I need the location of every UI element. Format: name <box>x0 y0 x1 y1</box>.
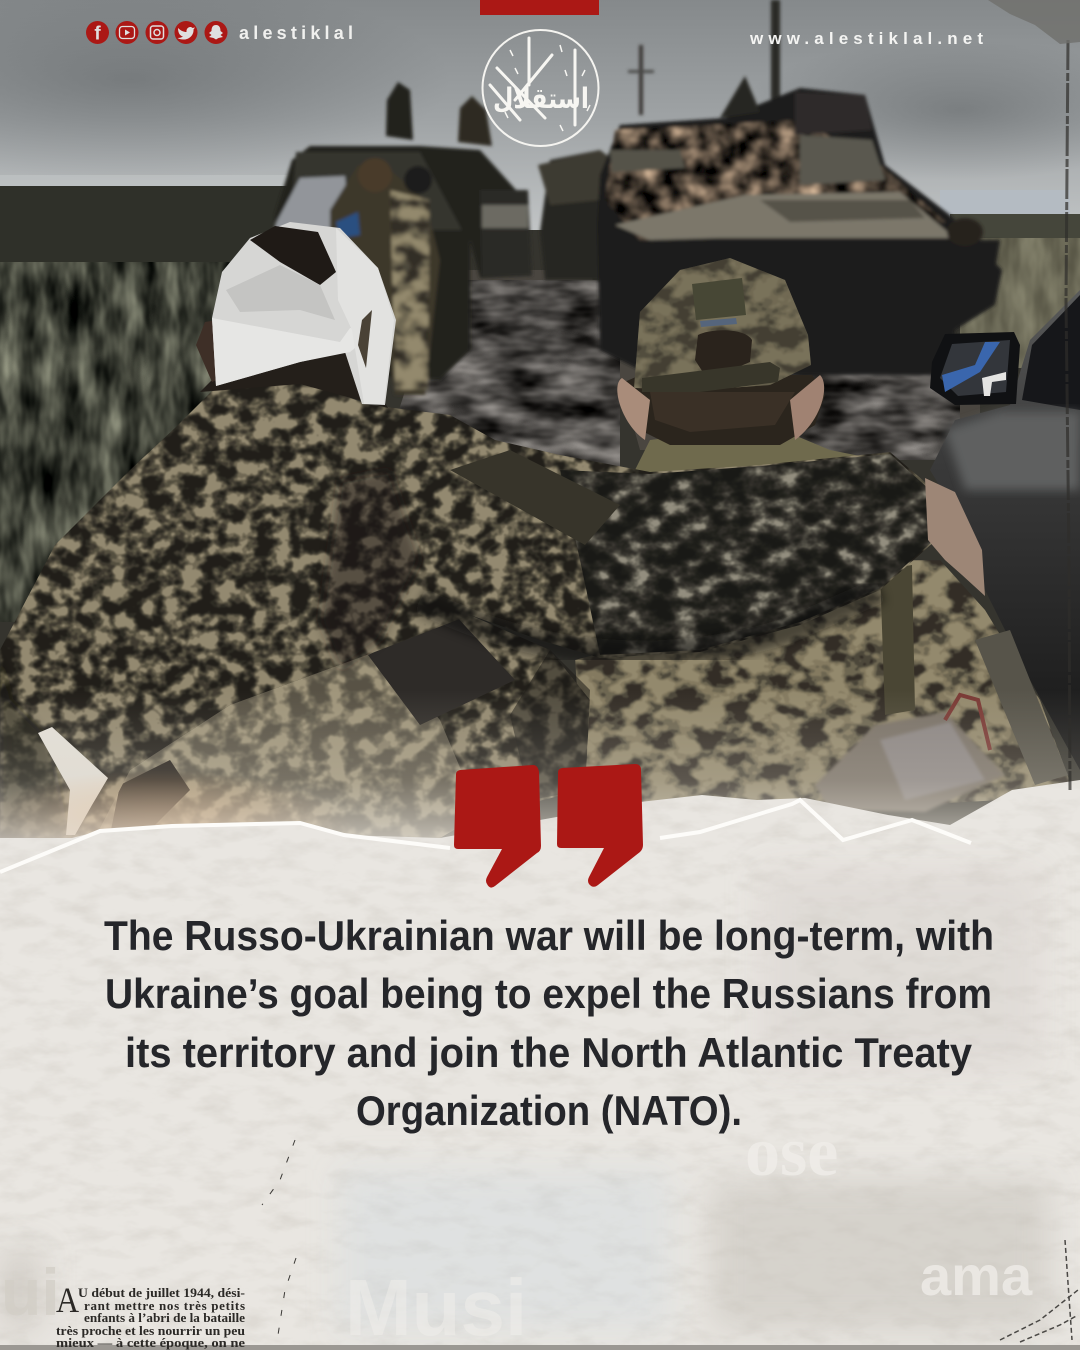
photo base <box>0 230 1080 840</box>
instagram icon <box>146 21 168 44</box>
distant field on the right <box>940 190 1080 368</box>
right grunge edge <box>1066 40 1070 790</box>
torn white edge <box>0 800 971 872</box>
sky <box>0 0 1080 240</box>
paper cracks <box>262 1140 296 1335</box>
head bandage <box>196 222 396 405</box>
newspaper clipping text: A <box>56 1280 79 1320</box>
headline quote <box>104 912 994 1134</box>
muddy road <box>380 270 980 470</box>
hand on shoulder <box>925 478 985 596</box>
back and pack <box>575 560 1070 815</box>
tank <box>538 0 1002 375</box>
headline quote: its territory and join the North Atlantic Treaty <box>125 1029 973 1076</box>
facebook icon: f <box>94 24 101 44</box>
bottom grunge edge <box>0 1342 1080 1350</box>
quotation mark icon <box>454 764 643 888</box>
newspaper clipping text: enfants à l’abri de la bataille <box>84 1310 245 1325</box>
newspaper clipping text: mieux — à cette époque, on ne <box>56 1335 245 1350</box>
tinted collage patches <box>0 870 1050 1330</box>
soldiers on the truck <box>386 82 413 140</box>
newspaper clipping text <box>56 1280 245 1350</box>
cap <box>634 258 811 392</box>
torn paper panel <box>0 780 1080 1350</box>
facebook icon <box>86 21 109 44</box>
warm light glow <box>0 770 360 900</box>
top right torn corner <box>988 0 1080 44</box>
car on the right <box>930 290 1080 770</box>
left soldier body and arm <box>0 380 936 838</box>
ghost lettering: ose <box>745 1114 838 1191</box>
head <box>618 375 825 445</box>
paper collage texture <box>0 780 1080 1350</box>
headline quote: The Russo-Ukrainian war will be long-term, with <box>104 912 994 959</box>
collar <box>635 425 880 485</box>
twitter icon <box>174 21 198 44</box>
newspaper clipping text: très proche et les nourrir un peu <box>56 1323 245 1338</box>
headline quote: Organization (NATO). <box>356 1087 742 1134</box>
logo roundel: استقلال <box>493 82 589 115</box>
bottom right grunge scratches <box>1000 1240 1078 1342</box>
background soldier <box>330 165 440 395</box>
ghost lettering: ama <box>920 1244 1033 1307</box>
distant field on the left <box>0 186 320 622</box>
bandaged hand <box>38 727 108 835</box>
right soldier <box>575 258 1070 815</box>
wing mirror <box>930 332 1020 405</box>
website: www.alestiklal.net <box>749 29 983 48</box>
youtube icon <box>116 21 138 44</box>
body shadows <box>320 470 420 670</box>
haze at the photo base <box>0 690 1080 840</box>
newspaper clipping text: rant mettre nos très petits <box>84 1298 245 1313</box>
headline quote: Ukraine’s goal being to expel the Russians from <box>105 970 992 1017</box>
truck column <box>275 82 532 395</box>
logo roundel <box>482 30 598 146</box>
neck <box>200 345 388 408</box>
left soldier's arm round the waist <box>95 615 590 838</box>
ghost lettering: ui <box>1 1255 60 1329</box>
snapchat icon <box>204 21 228 44</box>
ghost lettering: Musi <box>345 1263 527 1350</box>
red top tab <box>480 0 599 15</box>
handle: alestiklal <box>239 23 353 43</box>
social icons <box>86 21 228 44</box>
newspaper clipping text: U début de juillet 1944, dési- <box>78 1285 245 1300</box>
photo: soldiers and armoured vehicles <box>0 0 1080 900</box>
ghost lettering <box>1 1114 1033 1350</box>
